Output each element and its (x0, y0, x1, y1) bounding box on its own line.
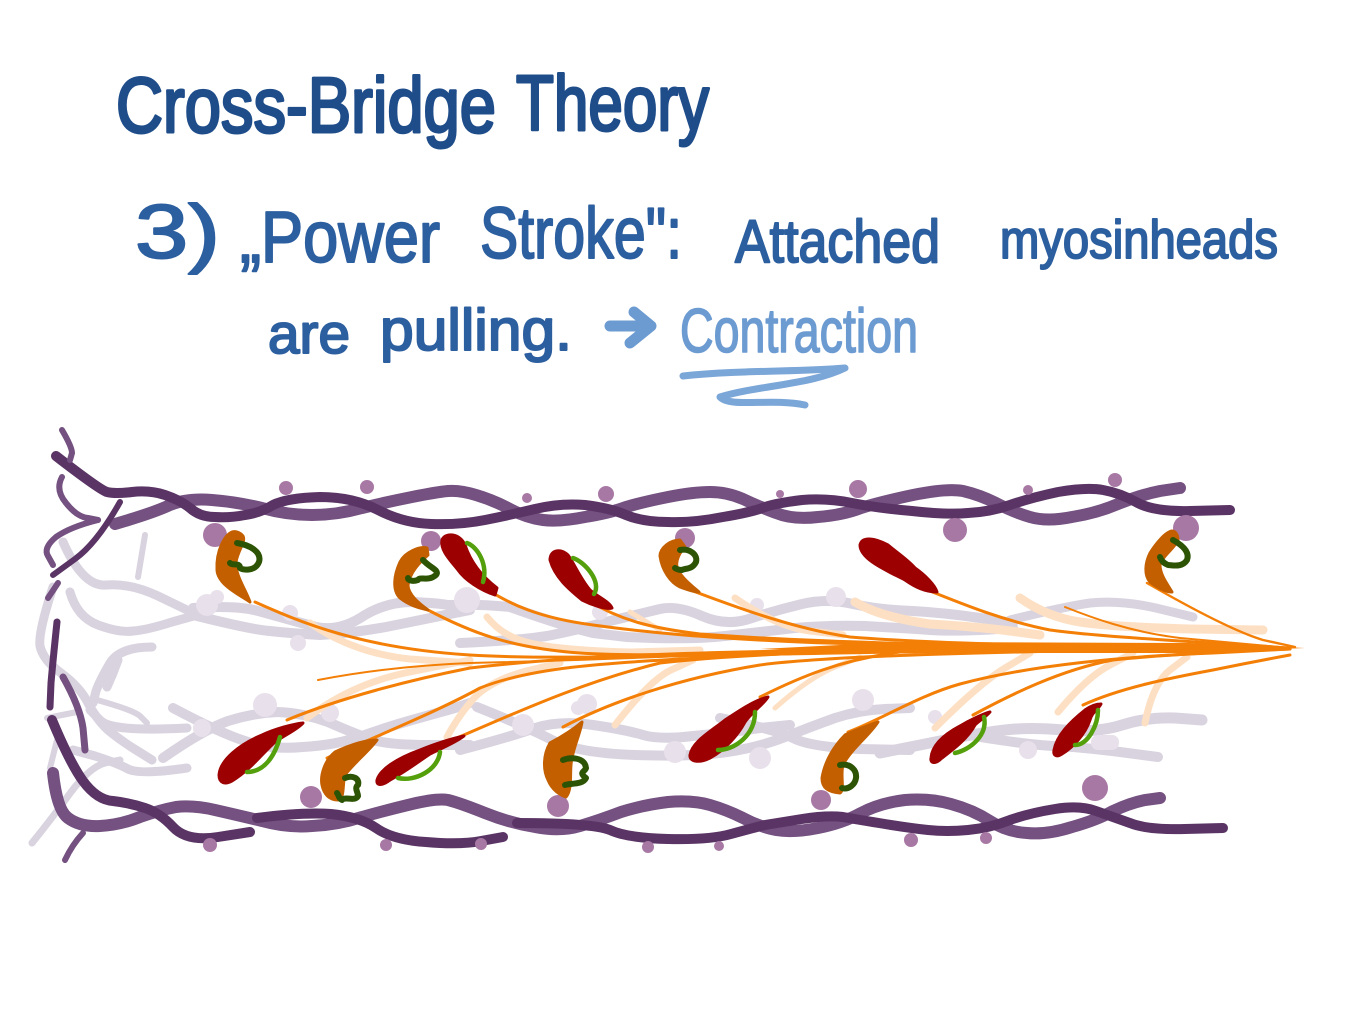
myosin heads in resting state (217, 531, 1178, 800)
faded resting-state filaments (32, 535, 1202, 843)
step heading: Power Stroke: 3) (135, 190, 220, 275)
ATP loops on resting heads (230, 540, 1188, 800)
myosin heads in power stroke (219, 535, 1101, 784)
step heading: Power Stroke: myosinheads (1000, 210, 1278, 270)
step heading: Power Stroke: „Power (240, 198, 440, 278)
upper thin filament: dark strand (56, 456, 1230, 524)
title: Theory (516, 59, 709, 147)
underline scribble (683, 368, 845, 405)
ADP arcs on power stroke heads (247, 543, 1098, 779)
step heading: Power Stroke (135, 190, 1278, 365)
left tangle (32, 535, 197, 843)
lower thin filament: dark strand (52, 720, 1223, 843)
faded globular blobs (193, 587, 1119, 769)
upper thin filament: light strand (115, 488, 1180, 524)
title: Cross-Bridge (116, 61, 496, 149)
step heading: Power Stroke: Stroke": (480, 194, 682, 274)
arrow to contraction (610, 312, 651, 343)
faded orange motion strokes (307, 598, 1263, 737)
thick filament central bundle (760, 642, 1305, 653)
label: Contraction: Contraction (680, 297, 918, 366)
step heading: Power Stroke: are (268, 302, 350, 365)
step heading: Power Stroke: pulling. (380, 298, 572, 363)
left end branches (47, 430, 120, 860)
step heading: Power Stroke: Attached (735, 208, 940, 275)
lower thin filament: light strand (53, 773, 1160, 833)
myosin thick filament fan (255, 583, 1295, 758)
actin globular binding sites (203, 473, 1199, 853)
